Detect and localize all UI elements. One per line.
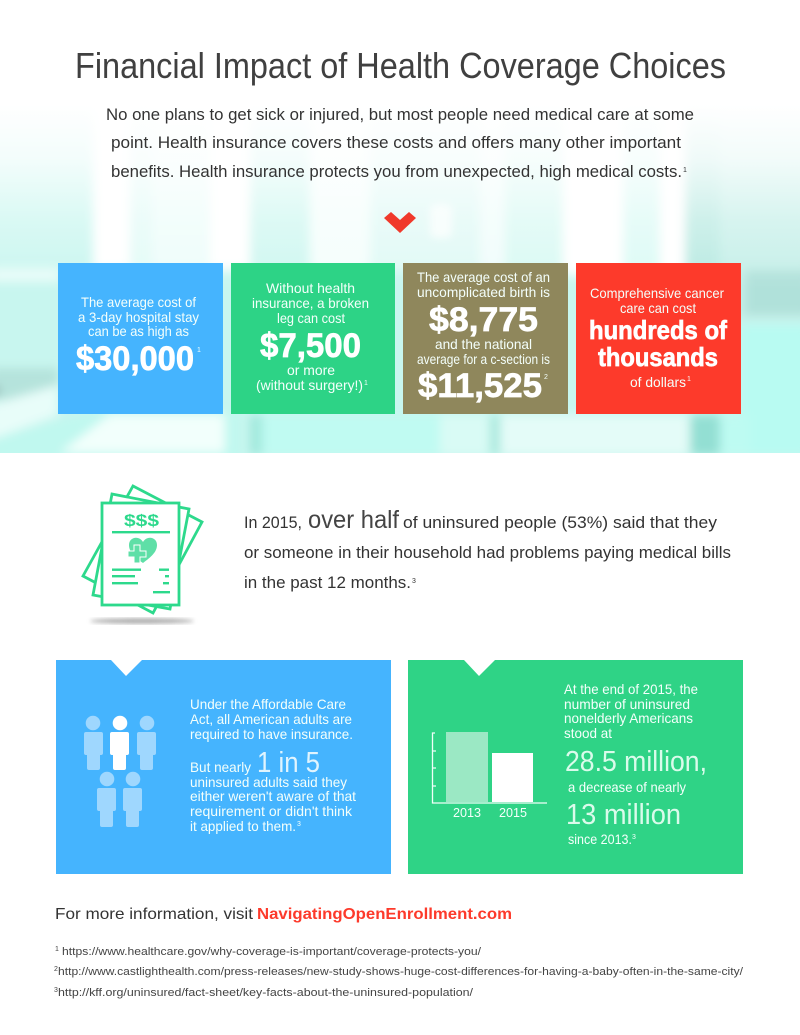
panel text: stood at xyxy=(564,725,612,741)
panel: birth cost: average for a c-section is xyxy=(417,351,550,367)
intro paragraph xyxy=(106,105,694,181)
panel: affordable care act awareness xyxy=(56,660,391,874)
panel text xyxy=(564,681,707,847)
text block: over half of uninsured people: In 2015, xyxy=(244,513,302,532)
panel: hospital stay cost: The average cost of xyxy=(81,294,196,310)
panel text: 13 million xyxy=(566,799,681,831)
panel: cancer care cost: Comprehensive cancer xyxy=(590,285,724,301)
footnotes: 2 xyxy=(54,966,58,973)
panel: birth cost: 2 xyxy=(544,374,548,381)
figure: $8,775: $8,775 xyxy=(429,301,538,339)
icon: group of people xyxy=(84,716,156,827)
footnotes: 3 xyxy=(54,987,58,994)
footnotes: https://www.healthcare.gov/why-coverage-is-important/coverage-protects-you/ xyxy=(62,946,482,958)
intro paragraph: benefits. Health insurance protects you from unexpected, high medical costs. xyxy=(111,162,682,181)
panel: broken leg cost xyxy=(231,263,395,414)
panel text: it applied to them. xyxy=(190,818,296,834)
panel text: uninsured adults said they xyxy=(190,774,347,790)
figure: $7,500: $7,500 xyxy=(260,327,361,365)
panel text: nonelderly Americans xyxy=(564,710,693,726)
panel text: required to have insurance. xyxy=(190,726,353,742)
text block: over half of uninsured people xyxy=(244,506,731,592)
panel text: 1 in 5 xyxy=(257,747,320,779)
icon: medical bills xyxy=(83,486,202,624)
panel text: 3 xyxy=(632,834,636,841)
panel: broken leg cost: (without surgery!) xyxy=(256,377,363,393)
panel: hospital stay cost xyxy=(58,263,223,414)
panel: birth cost xyxy=(403,263,568,414)
footnotes: http://www.castlighthealth.com/press-releases/new-study-shows-huge-cost-differences-for-having-a-baby-often-in-the-same-city/ xyxy=(58,966,744,978)
figure: hundreds of thousands xyxy=(589,315,727,372)
text block: over half of uninsured people: or someone in their household had problems paying medical bills xyxy=(244,543,731,562)
intro paragraph: No one plans to get sick or injured, but most people need medical care at some xyxy=(106,105,694,124)
panel text: number of uninsured xyxy=(564,696,690,712)
panel: broken leg cost: or more xyxy=(287,362,335,378)
panel text: requirement or didn't think xyxy=(190,803,353,819)
panel: hospital stay cost: 1 xyxy=(197,347,201,354)
footnotes xyxy=(54,946,744,999)
panel text: since 2013. xyxy=(568,831,632,847)
panel: birth cost: The average cost of an xyxy=(417,269,550,285)
figure: hundreds of thousands: thousands xyxy=(598,342,718,372)
figure: hundreds of thousands: hundreds of xyxy=(589,315,727,345)
icon: red chevron xyxy=(384,212,416,233)
footnotes: http://kff.org/uninsured/fact-sheet/key-facts-about-the-uninsured-population/ xyxy=(58,987,474,999)
panel text: Act, all American adults are xyxy=(190,711,352,727)
bar chart: 2013 vs 2015: 2013 xyxy=(453,805,481,820)
text block: over half of uninsured people: over half xyxy=(308,506,399,534)
panel text xyxy=(190,696,356,834)
panel: cancer care cost: care can cost xyxy=(620,300,696,316)
panel: broken leg cost: 1 xyxy=(364,380,368,387)
panel: cancer care cost: 1 xyxy=(687,376,691,383)
panel: broken leg cost: Without health xyxy=(266,280,355,296)
text block: over half of uninsured people: 3 xyxy=(412,578,416,585)
icon: medical bills: $$$ xyxy=(124,511,160,530)
call to action: For more information, visit xyxy=(55,906,254,923)
panel: broken leg cost: leg can cost xyxy=(277,310,345,326)
panel: hospital stay cost: can be as high as xyxy=(88,323,189,339)
panel text: either weren't aware of that xyxy=(190,788,356,804)
panel text: But nearly xyxy=(190,759,251,775)
text block: over half of uninsured people: in the past 12 months. xyxy=(244,573,411,592)
panel: hospital stay cost: a 3-day hospital stay xyxy=(78,309,199,325)
figure: $30,000: $30,000 xyxy=(76,340,194,378)
panel text: Under the Affordable Care xyxy=(190,696,346,712)
call to action xyxy=(55,906,512,923)
panel: uninsured decrease xyxy=(408,660,743,874)
title: Financial Impact of Health Coverage Choices xyxy=(75,45,726,86)
panel text: At the end of 2015, the xyxy=(564,681,698,697)
bar chart: 2013 vs 2015 xyxy=(432,732,547,820)
icon shadow xyxy=(90,618,194,624)
bar chart: 2013 vs 2015: 2015 xyxy=(499,805,527,820)
panel: cancer care cost xyxy=(576,263,741,414)
figure: $11,525: $11,525 xyxy=(418,367,542,405)
intro paragraph: 1 xyxy=(683,167,687,174)
intro paragraph: point. Health insurance covers these costs and offers many other important xyxy=(111,133,681,152)
panel text: 3 xyxy=(297,821,301,828)
panel text: a decrease of nearly xyxy=(568,779,686,795)
panel text: 28.5 million, xyxy=(565,746,707,778)
panel: birth cost: and the national xyxy=(435,336,532,352)
footnotes: 1 xyxy=(55,946,59,953)
text block: over half of uninsured people: of uninsured people (53%) said that they xyxy=(403,513,718,532)
panel: cancer care cost: of dollars xyxy=(630,374,686,390)
call to action: NavigatingOpenEnrollment.com xyxy=(257,906,512,923)
panel: broken leg cost: insurance, a broken xyxy=(252,295,369,311)
hero background: blurred hospital corridor xyxy=(0,133,800,453)
panel: birth cost: uncomplicated birth is xyxy=(417,284,550,300)
